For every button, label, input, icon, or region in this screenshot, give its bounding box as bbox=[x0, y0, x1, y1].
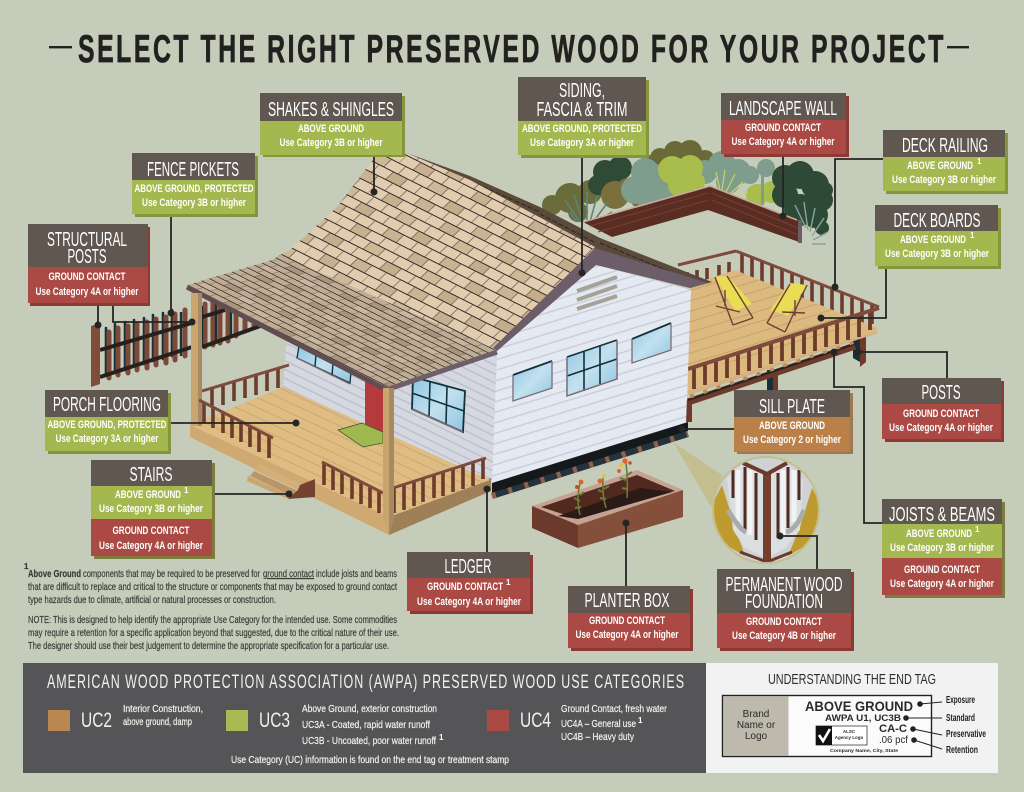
callout: joists and beams bbox=[882, 499, 1005, 598]
callout: fence pickets: ABOVE GROUND, PROTECTED bbox=[134, 183, 254, 195]
legend: UC4: UC4A – General use bbox=[561, 718, 636, 730]
legend: UC2: Interior Construction, bbox=[123, 703, 203, 715]
callout: deck boards bbox=[875, 205, 1001, 269]
callout: planter box: GROUND CONTACT bbox=[589, 615, 665, 627]
callout: structural posts: POSTS bbox=[68, 246, 106, 268]
illustration: background shrubs bbox=[542, 140, 833, 244]
deck floor bbox=[688, 270, 877, 372]
callout: posts: POSTS bbox=[922, 382, 960, 404]
callout: stairs: Use Category 4A or higher bbox=[99, 540, 204, 552]
footnotes text block: Above Ground bbox=[28, 568, 81, 580]
agency logo bbox=[816, 726, 867, 745]
window: porch bbox=[297, 346, 351, 384]
callout: siding, fascia and trim: ABOVE GROUND, PROTECTED bbox=[522, 123, 642, 135]
agency logo: Agency Logo bbox=[835, 735, 863, 740]
side rail bbox=[199, 400, 273, 458]
callout: stairs bbox=[91, 460, 215, 559]
end tag diagram: CA-C bbox=[879, 723, 907, 735]
leader lines bbox=[98, 154, 947, 586]
window: front bbox=[412, 377, 465, 432]
callout: structural posts bbox=[28, 224, 150, 306]
callout: fence pickets: FENCE PICKETS bbox=[147, 159, 239, 181]
illustration: fence bbox=[91, 298, 263, 387]
gable wall bbox=[492, 265, 691, 483]
legend: UC2: above ground, damp bbox=[123, 716, 192, 728]
callout: joists and beams: 1 bbox=[975, 525, 980, 534]
end tag labels: Standard bbox=[946, 713, 975, 724]
back rail bbox=[202, 365, 289, 407]
end tag diagram: Brand bbox=[743, 709, 769, 720]
callout: permanent wood foundation: GROUND CONTACT bbox=[746, 616, 822, 628]
illustration: deck bbox=[678, 251, 879, 422]
illustration: porch bbox=[190, 293, 491, 535]
callout: stairs: Use Category 3B or higher bbox=[99, 503, 204, 515]
callout: deck railing: ABOVE GROUND bbox=[907, 160, 973, 172]
callout: structural posts: Use Category 4A or higher bbox=[36, 286, 139, 298]
legend: UC4: Ground Contact, fresh water bbox=[561, 703, 667, 715]
legend: UC3: UC3A - Coated, rapid water runoff bbox=[302, 719, 430, 731]
end tag labels: Preservative bbox=[946, 729, 986, 740]
window: gable left bbox=[513, 361, 552, 401]
panel heading: AMERICAN WOOD PROTECTION ASSOCIATION (AWPA) PRESERVED WOOD USE CATEGORIES bbox=[47, 672, 685, 693]
callout: siding, fascia and trim bbox=[518, 77, 649, 158]
callout: siding, fascia and trim: Use Category 3A or higher bbox=[530, 137, 635, 149]
legend: UC3 bbox=[226, 703, 444, 747]
legend: UC4: UC4B – Heavy duty bbox=[561, 731, 635, 743]
post: left bbox=[191, 293, 202, 426]
post: right bbox=[383, 388, 394, 535]
callout: shakes and shingles bbox=[260, 93, 405, 157]
callout: porch flooring: Use Category 3A or higher bbox=[56, 433, 159, 445]
illustration: permanent wood foundation detail bbox=[673, 442, 822, 564]
footnotes text block: The designer should use their best judgement to determine the appropriate specification for a particular use. bbox=[28, 640, 389, 652]
callout: deck boards: 1 bbox=[970, 231, 975, 240]
window: gable middle bbox=[567, 340, 617, 396]
callout: landscape wall bbox=[721, 93, 849, 157]
legend: UC3: UC3 bbox=[259, 709, 290, 732]
callout: permanent wood foundation: PERMANENT WOOD bbox=[726, 574, 842, 596]
agency logo: ALSC bbox=[843, 729, 856, 734]
callout: sill plate: Use Category 2 or higher bbox=[743, 434, 842, 446]
callout: siding, fascia and trim: SIDING, bbox=[559, 80, 605, 102]
callout: porch flooring: PORCH FLOORING bbox=[53, 394, 161, 416]
leader dots bbox=[94, 188, 862, 540]
callout: posts: GROUND CONTACT bbox=[903, 408, 979, 420]
sill plate bbox=[492, 422, 688, 496]
legend: UC3: Above Ground, exterior construction bbox=[302, 703, 437, 715]
flowers bbox=[574, 458, 632, 515]
footnotes text block: include joists and beams bbox=[316, 568, 397, 580]
callout: sill plate bbox=[734, 390, 853, 454]
callout: deck boards: ABOVE GROUND bbox=[900, 234, 966, 246]
left wall bbox=[283, 338, 497, 483]
footnotes text block: components that may be required to be preserved for bbox=[83, 568, 260, 580]
callout: ledger: 1 bbox=[506, 578, 511, 587]
callout: planter box: Use Category 4A or higher bbox=[576, 629, 679, 641]
callout: planter box bbox=[568, 586, 693, 651]
door mat bbox=[338, 423, 383, 447]
roof: ridge bbox=[407, 153, 712, 288]
footnotes text block: that are difficult to replace and critical to the structure or components that may be exposed to ground contact bbox=[28, 581, 397, 593]
end tag diagram: AWPA U1, UC3B bbox=[825, 713, 901, 724]
callout: shakes and shingles: ABOVE GROUND bbox=[298, 123, 364, 135]
end tag labels: Exposure bbox=[946, 695, 975, 706]
legend: UC4 bbox=[487, 703, 667, 743]
chairs bbox=[715, 276, 807, 332]
end tag diagram: Name or bbox=[737, 720, 776, 731]
end tag diagram: Logo bbox=[745, 731, 768, 742]
right rail bbox=[393, 458, 486, 513]
callout: planter box: PLANTER BOX bbox=[584, 590, 670, 612]
callout: landscape wall: LANDSCAPE WALL bbox=[729, 98, 837, 120]
deck supports bbox=[686, 335, 866, 422]
callout: ledger: GROUND CONTACT bbox=[427, 581, 503, 593]
callout: landscape wall: Use Category 4A or higher bbox=[732, 136, 835, 148]
legend: UC4: 1 bbox=[638, 716, 643, 725]
callout: shakes and shingles: SHAKES & SHINGLES bbox=[268, 99, 394, 121]
illustration: planter box bbox=[532, 458, 683, 548]
callout: deck railing bbox=[883, 130, 1008, 194]
callout: ledger: Use Category 4A or higher bbox=[417, 596, 522, 608]
callout: sill plate: ABOVE GROUND bbox=[759, 420, 825, 432]
callout: porch flooring: ABOVE GROUND, PROTECTED bbox=[48, 419, 167, 431]
deck fascia bbox=[688, 331, 877, 393]
stairs bbox=[247, 464, 315, 499]
footnotes text block: ground contact bbox=[263, 568, 314, 580]
front rail bbox=[688, 308, 879, 389]
footnotes text block: type hazards due to climate, artificial or natural processes or construction. bbox=[28, 594, 276, 606]
footnotes text block: NOTE: This is designed to help identify the appropriate Use Category for the intended use. Some commodities bbox=[28, 614, 397, 626]
callout: siding, fascia and trim: FASCIA & TRIM bbox=[536, 99, 628, 121]
callout: shakes and shingles: Use Category 3B or higher bbox=[280, 137, 383, 149]
callout: deck railing: 1 bbox=[977, 157, 982, 166]
illustration: landscape wall bbox=[583, 186, 802, 243]
porch floor bbox=[190, 387, 490, 517]
callout: ledger bbox=[407, 552, 533, 614]
end tag diagram: .06 pcf bbox=[879, 734, 908, 746]
callout: sill plate: SILL PLATE bbox=[759, 396, 825, 418]
callout: porch flooring bbox=[45, 390, 171, 454]
footnotes text block: 1 bbox=[24, 562, 29, 571]
footnotes text block bbox=[24, 562, 399, 652]
footnotes text block: may require a retention for a specific application beyond that suggested, due to the critical nature of their use. bbox=[28, 627, 399, 639]
legend: UC3: 1 bbox=[439, 733, 444, 742]
end tag pointers bbox=[903, 701, 942, 749]
joists bbox=[688, 341, 855, 402]
callout: landscape wall: GROUND CONTACT bbox=[745, 122, 821, 134]
callout: stairs: ABOVE GROUND bbox=[115, 489, 181, 501]
callout: fence pickets: Use Category 3B or higher bbox=[142, 197, 247, 209]
callout: structural posts: GROUND CONTACT bbox=[48, 271, 126, 283]
callout: permanent wood foundation bbox=[717, 569, 854, 651]
porch edges bbox=[190, 425, 491, 535]
callout: permanent wood foundation: FOUNDATION bbox=[745, 591, 823, 613]
roof: upper plane bbox=[280, 153, 595, 350]
callout: posts: Use Category 4A or higher bbox=[889, 422, 994, 434]
callout: ledger: LEDGER bbox=[444, 556, 492, 578]
panel note: Use Category (UC) information is found on the end tag or treatment stamp bbox=[231, 754, 509, 766]
window: gable right bbox=[632, 323, 671, 363]
end tag diagram bbox=[722, 696, 932, 756]
callout: stairs: STAIRS bbox=[130, 464, 172, 486]
end tag labels bbox=[946, 695, 986, 756]
callout: joists and beams: GROUND CONTACT bbox=[904, 564, 980, 576]
end tag labels: Retention bbox=[946, 745, 978, 756]
vent bbox=[577, 277, 617, 309]
legend: UC2 bbox=[48, 703, 203, 732]
callout: permanent wood foundation: Use Category 4B or higher bbox=[732, 630, 837, 642]
panel: understanding the end tag bbox=[706, 663, 998, 773]
callout: joists and beams: ABOVE GROUND bbox=[906, 528, 972, 540]
panel: AWPA use categories bbox=[23, 663, 706, 773]
callout: fence pickets bbox=[132, 153, 258, 217]
legend: UC3: UC3B - Uncoated, poor water runoff bbox=[302, 735, 436, 747]
legend: UC2: UC2 bbox=[81, 709, 112, 732]
roof: porch plane bbox=[187, 255, 495, 387]
door bbox=[365, 378, 384, 433]
callout: stairs: 1 bbox=[184, 486, 189, 495]
callout: stairs: GROUND CONTACT bbox=[112, 525, 190, 537]
callout: structural posts: STRUCTURAL bbox=[47, 229, 127, 251]
illustration: house bbox=[187, 153, 712, 496]
back rail bbox=[678, 251, 879, 324]
end tag diagram: ABOVE GROUND bbox=[805, 698, 913, 714]
front rail bbox=[322, 462, 383, 513]
callout: posts bbox=[882, 378, 1004, 442]
end tag diagram: Company Name, City, State bbox=[830, 748, 899, 753]
panel heading: UNDERSTANDING THE END TAG bbox=[768, 671, 936, 688]
legend: UC4: UC4 bbox=[520, 709, 551, 732]
callout: deck boards: Use Category 3B or higher bbox=[885, 248, 990, 260]
roof: fascia bbox=[187, 248, 708, 390]
